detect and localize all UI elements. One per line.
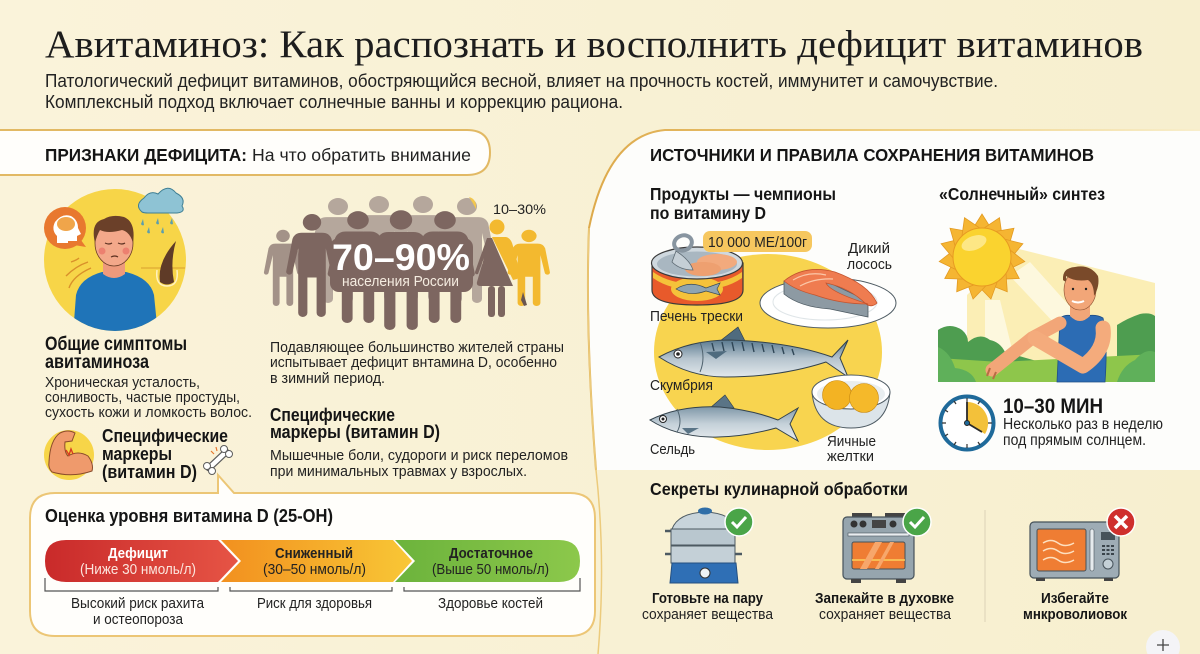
text: majority description: в зимний период. bbox=[270, 370, 385, 387]
people chart: 70-90% of population: населения России bbox=[342, 273, 459, 290]
text: general symptoms: Общие симптомы bbox=[45, 334, 187, 355]
heading: Оценка уровня витамина D (25-OH) bbox=[45, 506, 333, 526]
text: microwave: мнкроволиовок bbox=[1023, 607, 1128, 623]
percentage plate bbox=[330, 238, 473, 292]
icon: rain cloud bbox=[138, 188, 183, 213]
scale bar: deficit: Дефицит bbox=[108, 546, 168, 562]
text: steam: Готовьте на пару bbox=[652, 591, 763, 607]
text: general symptoms: авитаминоза bbox=[45, 352, 149, 373]
label: 10-30%: 10–30% bbox=[493, 201, 546, 217]
scale captions bbox=[71, 596, 543, 628]
scale captions: Высокий риск рахита bbox=[71, 596, 205, 612]
icon: shirt bbox=[73, 272, 158, 335]
text: general symptoms bbox=[45, 334, 252, 421]
subtitle text block bbox=[45, 70, 998, 112]
text: specific markers left: Специфические bbox=[102, 426, 228, 446]
text: oven bbox=[815, 591, 954, 623]
icon: clock bbox=[940, 396, 994, 450]
scale captions: Риск для здоровья bbox=[257, 596, 372, 612]
icon: microwave forbidden bbox=[1107, 508, 1135, 536]
icon: brain speech bubble bbox=[44, 207, 86, 249]
text: specific markers middle: маркеры (витамин D) bbox=[270, 422, 440, 442]
scale bar: deficit bbox=[45, 540, 238, 582]
label: wild salmon bbox=[847, 240, 892, 273]
scale bar: sufficient: Достаточное bbox=[449, 546, 533, 562]
text: specific markers left: (витамин D) bbox=[102, 462, 197, 482]
scale bar: reduced: Сниженный bbox=[275, 546, 353, 562]
text: specific markers left: маркеры bbox=[102, 444, 172, 464]
text: specific markers left bbox=[102, 426, 228, 482]
text: steam bbox=[642, 591, 774, 623]
text: specific markers middle: Мышечные боли, судороги и риск переломов bbox=[270, 447, 568, 464]
people chart: 70-90% of population: 70–90% bbox=[332, 237, 470, 278]
scale bar: reduced bbox=[221, 540, 412, 582]
text: microwave: Избегайте bbox=[1041, 591, 1109, 607]
label: wild salmon: Дикий bbox=[848, 240, 890, 257]
icon: tired person with symptoms bbox=[44, 188, 186, 335]
scale bar: sufficient bbox=[395, 540, 580, 582]
heading: champion products: по витамину D bbox=[650, 203, 766, 223]
heading: solar synthesis: «Солнечный» синтез bbox=[939, 184, 1105, 204]
back row people bbox=[310, 196, 495, 303]
text: oven: Запекайте в духовке bbox=[815, 591, 954, 607]
panel heading: signs of deficiency: На что обратить внимание bbox=[252, 145, 471, 165]
subtitle text block: Комплексный подход включает солнечные ванны и коррекцию рациона. bbox=[45, 91, 623, 112]
icon: sun bbox=[938, 214, 1026, 301]
icon: steamer bbox=[665, 508, 742, 583]
panel: cooking secrets bbox=[642, 479, 1135, 623]
label: herring: Сельдь bbox=[650, 441, 695, 458]
icon: herring bbox=[650, 395, 798, 441]
scale captions: и остеопороза bbox=[93, 612, 184, 628]
heading: champion products bbox=[650, 184, 836, 223]
icon: oven bbox=[843, 513, 914, 583]
yellow backdrop bbox=[654, 254, 882, 450]
plus button bbox=[1146, 630, 1180, 654]
man bbox=[1057, 315, 1106, 382]
icon: oven check bbox=[903, 508, 931, 536]
scale captions: Здоровье костей bbox=[438, 596, 543, 612]
text: 10-30 min: под прямым солнцем. bbox=[1003, 432, 1146, 449]
panel heading: signs of deficiency: ПРИЗНАКИ ДЕФИЦИТА: bbox=[45, 145, 247, 165]
text: general symptoms: сонливость, частые простуды, bbox=[45, 389, 240, 406]
label: mackerel: Скумбрия bbox=[650, 377, 713, 394]
text: specific markers middle: Специфические bbox=[270, 405, 395, 425]
text: oven: сохраняет вещества bbox=[819, 607, 952, 623]
scale bar: sufficient: (Выше 50 нмоль/л) bbox=[432, 562, 549, 578]
panel: vitamin D level assessment bbox=[30, 475, 595, 636]
people chart: 70-90% of population bbox=[264, 196, 550, 330]
label: cod liver: Печень трески bbox=[650, 308, 743, 325]
panel heading: signs of deficiency bbox=[0, 130, 490, 175]
text: majority description: Подавляющее большинство жителей страны bbox=[270, 339, 564, 356]
small person left bbox=[264, 230, 302, 306]
icon: canned cod liver bbox=[652, 233, 743, 305]
yellow man and woman bbox=[475, 220, 550, 317]
heading: champion products: Продукты — чемпионы bbox=[650, 184, 836, 204]
text: 10-30 min: Несколько раз в неделю bbox=[1003, 416, 1163, 433]
icon: muscle bbox=[44, 430, 94, 480]
icon: bone bbox=[204, 446, 232, 474]
heading: sources and rules: ИСТОЧНИКИ И ПРАВИЛА СОХРАНЕНИЯ ВИТАМИНОВ bbox=[650, 145, 1094, 165]
front row people bbox=[286, 210, 475, 330]
text: majority description bbox=[270, 339, 564, 387]
food illustration group bbox=[650, 231, 896, 465]
text: majority description: испытывает дефицит внтамина D, особенно bbox=[270, 354, 557, 371]
text: steam: сохраняет вещества bbox=[642, 607, 774, 623]
scale bar: deficit: (Ниже 30 нмоль/л) bbox=[80, 562, 196, 578]
badge: 10 000 IU: 10 000 МЕ/100г bbox=[708, 235, 807, 251]
icon: mackerel bbox=[659, 327, 848, 377]
text: specific markers middle bbox=[270, 405, 568, 480]
subtitle text block: Патологический дефицит витаминов, обостряющийся весной, влияет на прочность костей, иммунитет и самочувствие. bbox=[45, 70, 998, 91]
icon: hair follicle bbox=[141, 267, 185, 269]
text: microwave bbox=[1023, 591, 1128, 623]
scale bar: reduced: (30–50 нмоль/л) bbox=[263, 562, 366, 578]
label: egg yolks: Яичные bbox=[827, 433, 876, 450]
label: egg yolks bbox=[827, 433, 876, 465]
text: general symptoms: Хроническая усталость, bbox=[45, 374, 200, 391]
icon: steamer check bbox=[725, 508, 753, 536]
icon: bowl with egg yolks bbox=[812, 375, 890, 428]
panel: sources bbox=[588, 130, 1200, 654]
text: 10-30 min bbox=[1003, 395, 1163, 449]
label: wild salmon: лосось bbox=[847, 256, 892, 273]
title: Авитаминоз: Как распознать и восполнить дефицит витаминов bbox=[45, 23, 1143, 66]
trees and grass bbox=[938, 313, 1155, 362]
text: 10-30 min: 10–30 МИН bbox=[1003, 395, 1103, 418]
sun beams bbox=[967, 249, 1155, 360]
label: egg yolks: желтки bbox=[827, 448, 874, 465]
text: general symptoms: сухость кожи и ломкость волос. bbox=[45, 404, 252, 421]
text: specific markers middle: при минимальных травмах у взрослых. bbox=[270, 463, 527, 480]
heading: Секреты кулинарной обработки bbox=[650, 479, 908, 499]
icon: salmon on plate bbox=[760, 269, 896, 328]
illustration: man sunbathing bbox=[938, 214, 1155, 382]
icon: microwave bbox=[1030, 522, 1119, 581]
